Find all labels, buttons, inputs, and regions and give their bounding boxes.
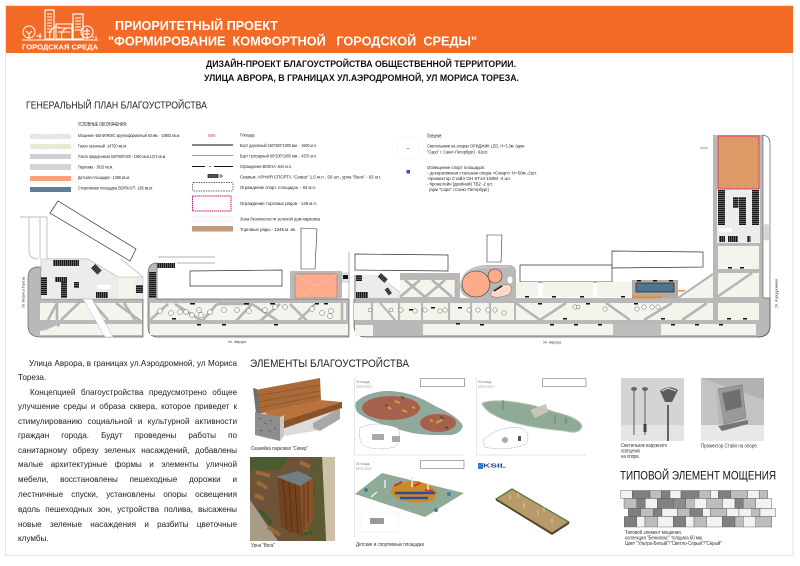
playground card 1: 2357357 2357377 xyxy=(356,385,372,389)
street labels xyxy=(20,276,778,344)
lamp photo xyxy=(621,378,684,441)
legend text right: Площадь xyxy=(240,132,255,138)
lighting legend: "Саро" г. Санкт-Петербург) - 92шт. xyxy=(427,150,488,154)
description text block: мебели, восстановлены пешеходные дорожки и xyxy=(18,475,237,484)
section C paving xyxy=(354,272,770,337)
lighting legend: - Кронштейн (двойной) ТБ2 -2 шт. xyxy=(427,180,493,186)
description text block: Улица Аврора, в границах ул.Аэродромной, ул Мориса xyxy=(29,359,237,368)
sport ground xyxy=(632,280,685,298)
playground cluster xyxy=(460,265,516,298)
description text block: вдоль пешеходных зон, устройства полива, высажены xyxy=(18,505,237,514)
legend symbols right: 000 xyxy=(208,133,216,138)
legend text right: Торговые ряды - 1346 м. кв. xyxy=(240,227,296,232)
street labels: Ул. Аврора xyxy=(543,340,562,344)
playground card 2 xyxy=(476,378,586,455)
lighting legend: (арм "Саро" г.Санкт-Петербург) xyxy=(429,187,489,192)
description text block: новые зеленые насаждения и разбиты цветочные xyxy=(18,520,237,529)
bench caption: Скамейка парковая "Север" xyxy=(251,445,308,452)
projector caption: Прожектор Стайл на опоре. xyxy=(701,442,758,450)
header banner xyxy=(6,6,793,53)
description text block: лестничные спуски, установлены опоры освещения xyxy=(18,490,237,499)
project subtitle: ДИЗАЙН-ПРОЕКТ БЛАГОУСТРОЙСТВА ОБЩЕСТВЕННОЙ ТЕРРИТОРИИ. xyxy=(206,58,516,70)
access roads xyxy=(20,217,349,298)
description text block: санитарному обрезу зеленых насаждений, добавлены xyxy=(18,446,237,455)
legend: УСЛОВНЫЕ ОБОЗНАЧЕНИЯ: xyxy=(78,122,127,128)
legend swatches left xyxy=(30,134,71,192)
project subtitle: УЛИЦА АВРОРА, В ГРАНИЦАХ УЛ.АЭРОДРОМНОЙ, УЛ МОРИСА ТОРЕЗА. xyxy=(204,72,519,84)
paving caption xyxy=(625,529,722,547)
legend text left: Мощение -БЕНИЛЮКС крупноформатный 60 мм. - 10882 кв.м. xyxy=(78,132,180,138)
banner title: "ФОРМИРОВАНИЕ КОМФОРТНОЙ ГОРОДСКОЙ СРЕДЫ" xyxy=(108,34,477,48)
lighting legend: - декоративная стальная опора «Смарт» Н=50м.-2шт. xyxy=(427,170,537,176)
logo: Городская среда xyxy=(22,10,99,52)
tower section xyxy=(700,135,770,337)
playground card 3: 28 площад. xyxy=(356,461,370,466)
banner title xyxy=(108,18,477,48)
benches xyxy=(172,267,747,326)
description text block: стимулированию социальной и культурной активности xyxy=(18,417,237,426)
lamp caption: на опоре. xyxy=(621,454,640,460)
description text block xyxy=(18,359,237,543)
heading: paving element: ТИПОВОЙ ЭЛЕМЕНТ МОЩЕНИЯ xyxy=(620,470,776,482)
description text block: Концепцией благоустройства предусмотрено общее xyxy=(30,388,237,397)
legend text right: Борт дорожный 150*300*1000 мм. - 1500 м.п. xyxy=(240,142,317,148)
legend text left xyxy=(78,132,180,190)
lamp caption: Светильник наружного xyxy=(621,443,667,449)
buildings xyxy=(50,201,703,286)
lighting legend: Светильники на опорах ОРИДЖИК LED, Н=3,3м. (арм- xyxy=(427,144,525,148)
trees xyxy=(158,304,660,318)
legend text right: Ограждение спорт. площадок. - 94 м.п. xyxy=(240,185,316,190)
street labels: Ул. Аэродромная xyxy=(774,279,778,308)
legend text left: Газон газонный -14750 кв.м. xyxy=(78,142,127,148)
playground card 1: 25 площад. xyxy=(356,379,370,384)
street labels: Ул. Мориса Тореза xyxy=(20,276,26,308)
master plan drawing xyxy=(20,135,778,344)
legend text right xyxy=(240,132,381,232)
urn photo xyxy=(250,457,335,541)
legend text left: Детская площадка - 1388 кв.м. xyxy=(78,175,130,180)
playground card 3 xyxy=(354,460,464,537)
heading: elements: ЭЛЕМЕНТЫ БЛАГОУСТРОЙСТВА xyxy=(250,357,410,370)
description text block: граждан города. Будут проведены работы по xyxy=(18,431,237,440)
section B paving xyxy=(148,263,349,337)
project subtitle xyxy=(204,58,519,84)
playground card 2: 26 площад. xyxy=(478,379,492,384)
description text block: клумбы. xyxy=(18,534,49,543)
projector photo xyxy=(701,378,764,441)
lighting legend: -прожектор Стайл ОН STэл-150М -4 шт. xyxy=(427,175,511,181)
legend text right: Зона безопасности зеленой дом-парковка xyxy=(240,216,320,222)
legend text right: Скамья: АРНИЯ СПОРТА "Север" 1,5 м.п.- 56 шт., урна "Вега" - 93 шт. xyxy=(240,174,381,180)
playground card 3: 2357357 2357377 xyxy=(356,467,372,471)
playground card 2: 2357357 2357377 xyxy=(478,385,494,389)
logo: Городская среда: ГОРОДСКАЯ СРЕДА xyxy=(22,42,99,52)
lamp caption xyxy=(621,443,667,460)
logo KSIL: KSIL xyxy=(483,464,507,470)
sports pad xyxy=(496,489,569,535)
logo KSIL xyxy=(478,463,507,470)
description text block: Тореза. xyxy=(18,373,46,382)
legend symbols right xyxy=(192,133,233,232)
lamp caption: освещения xyxy=(621,448,640,454)
street labels: Ул. Аврора xyxy=(228,339,247,344)
bench photo xyxy=(253,378,342,441)
description text block: малые архитектурные формы и элементы уличной xyxy=(18,460,237,469)
playground caption: Детские и спортивные площадки xyxy=(356,542,424,548)
paving caption: Цвет "Ультра-Белый"/"Светло-Серый"/"Серый" xyxy=(625,540,722,547)
legend text right: Ограждение торговых рядов - 149 м.п. xyxy=(240,201,317,206)
lighting legend: Освещение спорт площадок: xyxy=(427,165,485,170)
paving caption: Типовой элемент мощения. xyxy=(625,529,682,536)
paving caption: коллекция "Бенилюкс" толщина 60 мм. xyxy=(625,536,703,542)
paving pattern xyxy=(621,490,776,527)
playground card 1 xyxy=(354,378,464,455)
urn caption: Урна "Вега" xyxy=(251,543,275,549)
legend text left: Спортивная площадка ВОРКАУТ- 185 кв.м. xyxy=(78,186,153,190)
legend text right: Ограждение ВОЛНА- 544 м.п. xyxy=(240,164,292,169)
heading: master plan: ГЕНЕРАЛЬНЫЙ ПЛАН БЛАГОУСТРОЙСТВА xyxy=(26,100,207,112)
legend text left: Парковка - 3919 кв.м. xyxy=(78,164,113,170)
description text block: улучшение среды и образа сквера, которое приведет к xyxy=(18,402,237,411)
section A parking xyxy=(41,260,143,298)
legend xyxy=(30,122,381,232)
section A paving xyxy=(28,259,143,337)
legend text right: Борт тротуарный 80*200*1000 мм. - 4370 м.п. xyxy=(240,152,317,158)
lighting legend xyxy=(397,134,537,192)
trade zone salmon xyxy=(290,271,349,299)
banner title: ПРИОРИТЕТНЫЙ ПРОЕКТ xyxy=(115,18,278,33)
lighting legend: Освещение: xyxy=(427,134,442,140)
legend text left: Плита придорожная 600*800*160 - 1360 кв.м.1372 кв.м. xyxy=(78,154,166,159)
